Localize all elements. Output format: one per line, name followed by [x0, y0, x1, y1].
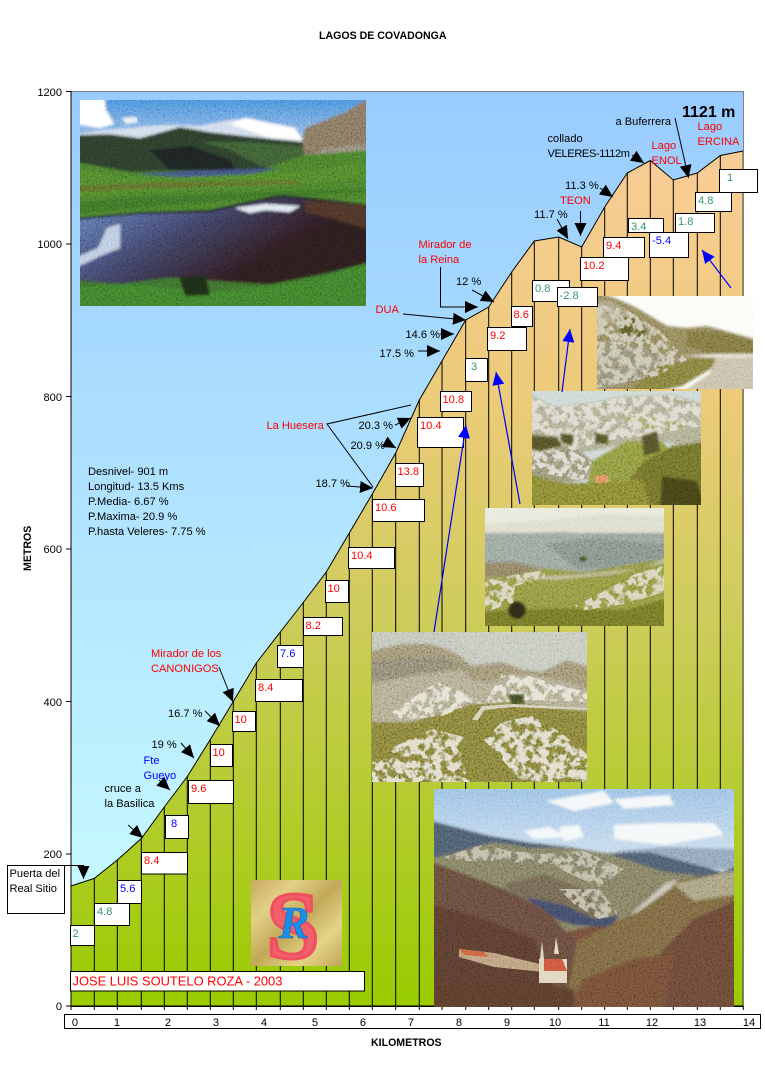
callout: 20.9 %: 20.9 %	[350, 440, 385, 452]
gradient percentage labels per 500 m: 5.6	[120, 883, 135, 895]
x axis scale box: 9	[504, 1017, 510, 1029]
author box	[70, 972, 364, 991]
callout: 11.7 %	[534, 209, 568, 239]
y axis: 600	[43, 544, 62, 556]
gradient percentage labels per 500 m: 10.4	[351, 550, 373, 562]
callout: 17.5 %	[380, 348, 440, 360]
x axis scale box: 10	[549, 1017, 561, 1029]
summary statistics: Longitud- 13.5 Kms	[88, 481, 185, 493]
callout: 12 %	[456, 276, 494, 302]
gradient percentage labels per 500 m: 4.8	[698, 195, 713, 207]
callout: Fte Gueyo: Gueyo	[144, 770, 176, 782]
photo: Covadonga basilica valley	[434, 789, 734, 1007]
callout: collado Veleres	[548, 133, 644, 163]
label: Lago Enol: ENOL	[652, 155, 682, 167]
plot background sky	[71, 91, 744, 1006]
label: Lago Ercina: Lago	[698, 121, 722, 133]
gradient percentage labels per 500 m: 8.4	[144, 855, 159, 867]
callout: TEON: TEON	[560, 195, 591, 207]
x axis scale box: 0	[72, 1017, 78, 1029]
photo: distant ranges	[485, 508, 664, 626]
callout: Puerta del Real Sitio	[8, 866, 84, 914]
author box: JOSE LUIS SOUTELO ROZA - 2003	[72, 974, 282, 988]
x axis scale box: 1	[114, 1017, 120, 1029]
gradient percentage labels per 500 m: 9.4	[606, 240, 621, 252]
callout: Mirador de los Canonigos: CANONIGOS	[151, 663, 219, 675]
callout: collado Veleres: VELERES-1112m	[548, 148, 630, 160]
summit altitude: 1121 m	[682, 104, 735, 121]
y axis: 1000	[37, 239, 62, 251]
photo: meadow with rocks	[532, 391, 701, 505]
callout: Mirador de la Reina	[418, 239, 478, 307]
callout: Puerta del Real Sitio: Real Sitio	[10, 883, 57, 895]
x axis scale box: 8	[456, 1017, 462, 1029]
gradient percentage labels per 500 m: 1.8	[678, 216, 693, 228]
photo: road near Lago Enol	[597, 296, 753, 389]
callout: DUA	[376, 304, 466, 320]
callout: 11.3 %: 11.3 %	[565, 180, 599, 192]
y axis title: METROS	[22, 526, 34, 571]
gradient percentage labels per 500 m: 10	[328, 583, 340, 595]
callout: 18.7 %: 18.7 %	[316, 478, 350, 490]
gradient percentage labels per 500 m	[70, 170, 758, 946]
gradient percentage labels per 500 m: 1	[727, 172, 733, 184]
callout: 16.7 %: 16.7 %	[168, 708, 203, 720]
callout: cruce a la Basilica	[104, 783, 155, 838]
callout: DUA: DUA	[376, 304, 400, 316]
callout: 16.7 %	[168, 708, 220, 726]
callout: 12 %: 12 %	[456, 276, 481, 288]
callout: Mirador de los Canonigos	[151, 648, 233, 702]
callout: 20.3 %	[358, 418, 411, 432]
gradient percentage labels per 500 m: 7.6	[280, 648, 295, 660]
callout: TEON	[560, 195, 591, 236]
y axis: 800	[43, 392, 62, 404]
summary statistics	[88, 466, 206, 538]
callout: 11.7 %: 11.7 %	[534, 209, 568, 221]
label: Lago Enol: Lago	[652, 140, 676, 152]
gradient percentage labels per 500 m: 8.2	[306, 620, 321, 632]
gradient percentage labels per 500 m: 13.8	[398, 466, 419, 478]
callout: 14.6 %: 14.6 %	[406, 329, 440, 341]
gradient percentage labels per 500 m: 9.6	[191, 783, 206, 795]
summary statistics: P.hasta Veleres- 7.75 %	[88, 526, 206, 538]
callout: Mirador de los Canonigos: Mirador de los	[151, 648, 222, 660]
gradient percentage labels per 500 m: 10	[234, 714, 247, 726]
gradient percentage labels per 500 m: 10	[212, 747, 225, 759]
gradient percentage labels per 500 m: 10.2	[583, 260, 605, 272]
gradient percentage labels per 500 m: 10.8	[442, 394, 464, 406]
y axis: 1200	[37, 87, 62, 99]
label: Lago Ercina	[698, 121, 740, 148]
callout: collado Veleres: collado	[548, 133, 583, 145]
callout: 17.5 %: 17.5 %	[380, 348, 414, 360]
x axis scale box: 11	[598, 1017, 610, 1029]
gradient percentage labels per 500 m: 10.6	[375, 502, 397, 514]
x axis scale box	[64, 1014, 760, 1029]
gradient percentage labels per 500 m: 10.4	[420, 420, 442, 432]
callout: 19 %	[152, 739, 194, 758]
summary statistics: Desnivel- 901 m	[88, 466, 168, 478]
x axis scale box: 6	[360, 1017, 366, 1029]
callout: cruce a la Basilica: la Basilica	[104, 798, 155, 810]
callout: Mirador de la Reina: la Reina	[418, 254, 460, 266]
gradient percentage labels per 500 m: 3	[471, 361, 477, 373]
callout: Fte Gueyo	[144, 755, 176, 790]
x axis scale box: 3	[213, 1017, 219, 1029]
callout: Mirador de la Reina: Mirador de	[418, 239, 472, 251]
gradient percentage labels per 500 m: 9.2	[490, 330, 505, 342]
gradient percentage labels per 500 m: 4.8	[97, 906, 112, 918]
photo: lake Ercina	[80, 100, 366, 306]
callout: 20.3 %: 20.3 %	[358, 420, 393, 432]
logo SR: S	[266, 872, 320, 979]
gradient percentage labels per 500 m: 8.4	[258, 682, 273, 694]
callout: cruce a la Basilica: cruce a	[104, 783, 142, 795]
callout: 11.3 %	[565, 180, 613, 197]
summary statistics: P.Maxima- 20.9 %	[88, 511, 177, 523]
gradient percentage labels per 500 m: 2	[72, 928, 79, 940]
title: LAGOS DE COVADONGA	[319, 30, 447, 42]
y axis: 400	[43, 697, 62, 709]
label: Lago Ercina: ERCINA	[698, 136, 740, 148]
gradient percentage labels per 500 m: 8.6	[514, 309, 529, 321]
logo SR: R	[278, 897, 309, 948]
callout: 19 %: 19 %	[152, 739, 177, 751]
photo: limestone mountains and road	[372, 632, 587, 782]
x axis scale box: 13	[694, 1017, 706, 1029]
y axis: 0	[56, 1001, 62, 1013]
logo SR	[251, 872, 342, 979]
y axis: 200	[43, 849, 62, 861]
x axis title: KILOMETROS	[371, 1037, 442, 1049]
x axis scale box: 4	[261, 1017, 267, 1029]
x axis scale box: 12	[646, 1017, 658, 1029]
gradient percentage labels per 500 m: 8	[171, 818, 177, 830]
x axis scale box: 7	[408, 1017, 414, 1029]
summary statistics: P.Media- 6.67 %	[88, 496, 169, 508]
callout: Puerta del Real Sitio: Puerta del	[10, 868, 60, 880]
x axis scale box: 5	[312, 1017, 318, 1029]
label: Lago Enol	[652, 140, 682, 167]
gradient percentage labels per 500 m: 0.8	[535, 283, 550, 295]
callout: La Huesera	[266, 405, 411, 487]
blue arrows linking photos to route	[434, 250, 731, 632]
x axis scale box: 2	[165, 1017, 171, 1029]
elevation profile area	[71, 151, 743, 1010]
callout: a Buferrera: a Buferrera	[616, 116, 672, 128]
callout: a Buferrera	[616, 116, 688, 178]
gradient percentage labels per 500 m: -2.8	[560, 290, 579, 302]
plot frame	[71, 92, 744, 1006]
callout: 18.7 %	[316, 478, 373, 490]
gradient percentage labels per 500 m: -5.4	[652, 235, 671, 247]
callout: Fte Gueyo: Fte	[144, 755, 160, 767]
gradient percentage labels per 500 m: 3.4	[631, 221, 646, 233]
x axis scale box: 14	[743, 1017, 755, 1029]
callout: La Huesera: La Huesera	[266, 420, 325, 432]
